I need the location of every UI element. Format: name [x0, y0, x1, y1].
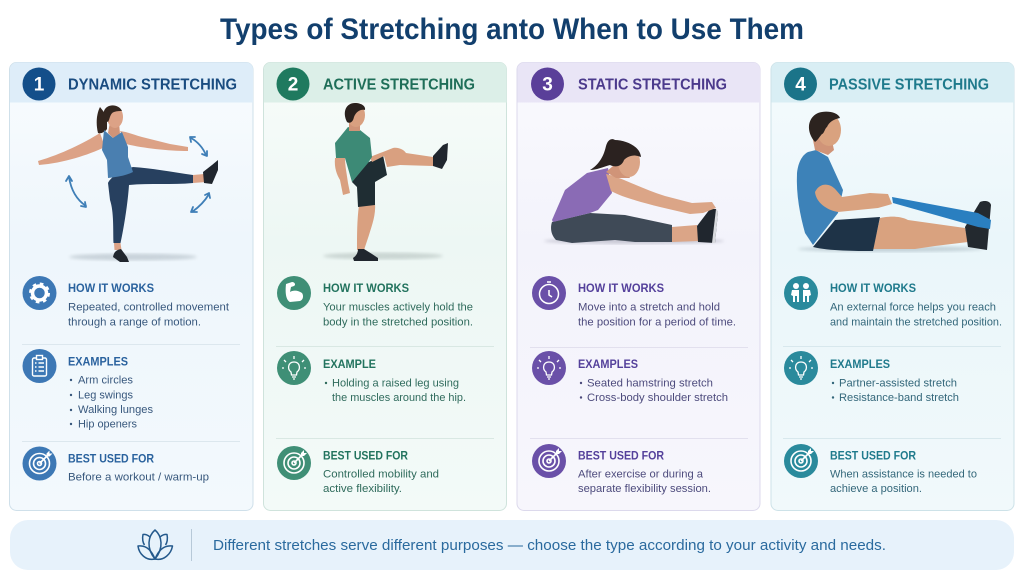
header: active stretching: ACTIVE STRETCHING	[323, 76, 475, 94]
examples: Resistance-band stretch	[839, 392, 959, 404]
examples: Cross-body shoulder stretch	[587, 392, 728, 404]
best used for: After exercise or during a	[578, 468, 704, 480]
best used for: achieve a position.	[830, 483, 922, 495]
how it works: An external force helps you reach	[830, 302, 996, 314]
how it works	[784, 276, 1002, 328]
header: dynamic stretching: DYNAMIC STRETCHING	[68, 76, 237, 94]
panel: static stretching	[517, 62, 760, 510]
how it works: the position for a period of time.	[578, 316, 736, 328]
footer banner: Different stretches serve different purposes — choose the type according to your activity and needs.	[213, 538, 886, 554]
examples: Leg swings	[78, 390, 133, 402]
examples: EXAMPLES	[578, 359, 638, 371]
motion arrows	[66, 137, 210, 212]
icon: target	[532, 444, 566, 478]
header: static stretching: STATIC STRETCHING	[578, 76, 727, 94]
how it works: HOW IT WORKS	[830, 283, 916, 295]
icon: light bulb	[277, 351, 311, 385]
how it works: body in the stretched position.	[323, 316, 473, 328]
examples: Hip openers	[78, 418, 137, 430]
icon: target	[784, 444, 818, 478]
header: active stretching	[264, 62, 506, 102]
header: passive stretching: PASSIVE STRETCHING	[829, 76, 989, 94]
best used for	[22, 446, 209, 484]
best used for: active flexibility.	[323, 483, 402, 495]
how it works	[22, 276, 229, 328]
examples: EXAMPLES	[830, 359, 890, 371]
best used for: BEST USED FOR	[830, 450, 917, 462]
icon: gear	[22, 276, 56, 310]
how it works: Repeated, controlled movement	[68, 302, 229, 314]
title: Types of Stretching anto When to Use Them	[220, 13, 804, 46]
examples: Walking lunges	[78, 404, 154, 416]
illustration: woman doing leg swing	[38, 105, 218, 262]
how it works	[277, 276, 473, 328]
icon: light bulb	[532, 351, 566, 385]
header: static stretching: 3	[542, 74, 553, 96]
panel: active stretching	[264, 62, 506, 510]
icon: light bulb	[784, 351, 818, 385]
illustration: seated hamstring stretch	[544, 139, 724, 244]
header: passive stretching	[772, 62, 1014, 102]
how it works: and maintain the stretched position.	[830, 316, 1002, 328]
example	[277, 351, 466, 404]
header: dynamic stretching	[10, 62, 253, 102]
panel: passive stretching	[771, 62, 1014, 510]
example: Holding a raised leg using	[332, 378, 459, 390]
best used for: When assistance is needed to	[830, 468, 977, 480]
header: active stretching: 2	[288, 74, 298, 96]
header: dynamic stretching: 1	[34, 74, 45, 96]
illustration: seated resistance band stretch	[797, 112, 991, 252]
icon: target	[277, 446, 311, 480]
best used for: Controlled mobility and	[323, 468, 439, 480]
best used for	[784, 444, 977, 495]
examples	[532, 351, 728, 404]
header: passive stretching: 4	[795, 74, 806, 96]
examples: Arm circles	[78, 374, 134, 386]
examples	[784, 351, 959, 404]
best used for	[277, 446, 439, 495]
best used for	[532, 444, 711, 495]
how it works: HOW IT WORKS	[578, 283, 664, 295]
icon: two people	[784, 276, 818, 310]
examples: EXAMPLES	[68, 356, 128, 368]
icon: flexed muscle	[277, 276, 311, 310]
how it works: Your muscles actively hold the	[323, 302, 473, 314]
panel: dynamic stretching	[10, 62, 253, 510]
icon: lotus	[138, 530, 172, 559]
how it works: through a range of motion.	[68, 316, 201, 328]
header: static stretching	[518, 62, 760, 102]
best used for: BEST USED FOR	[323, 450, 409, 462]
best used for: separate flexibility session.	[578, 483, 711, 495]
how it works: HOW IT WORKS	[323, 283, 409, 295]
examples	[22, 349, 154, 430]
example: the muscles around the hip.	[332, 392, 466, 404]
icon: target	[22, 446, 56, 480]
best used for: BEST USED FOR	[578, 450, 665, 462]
icon: clock	[532, 276, 566, 310]
best used for: BEST USED FOR	[68, 454, 155, 466]
examples: Partner-assisted stretch	[839, 378, 957, 390]
example: EXAMPLE	[323, 359, 376, 371]
illustration: man holding raised leg	[323, 103, 448, 261]
best used for: Before a workout / warm-up	[68, 472, 209, 484]
how it works	[532, 276, 736, 328]
icon: clipboard	[22, 349, 56, 383]
how it works: HOW IT WORKS	[68, 283, 154, 295]
footer banner	[10, 520, 1014, 570]
examples: Seated hamstring stretch	[587, 378, 713, 390]
how it works: Move into a stretch and hold	[578, 302, 720, 314]
